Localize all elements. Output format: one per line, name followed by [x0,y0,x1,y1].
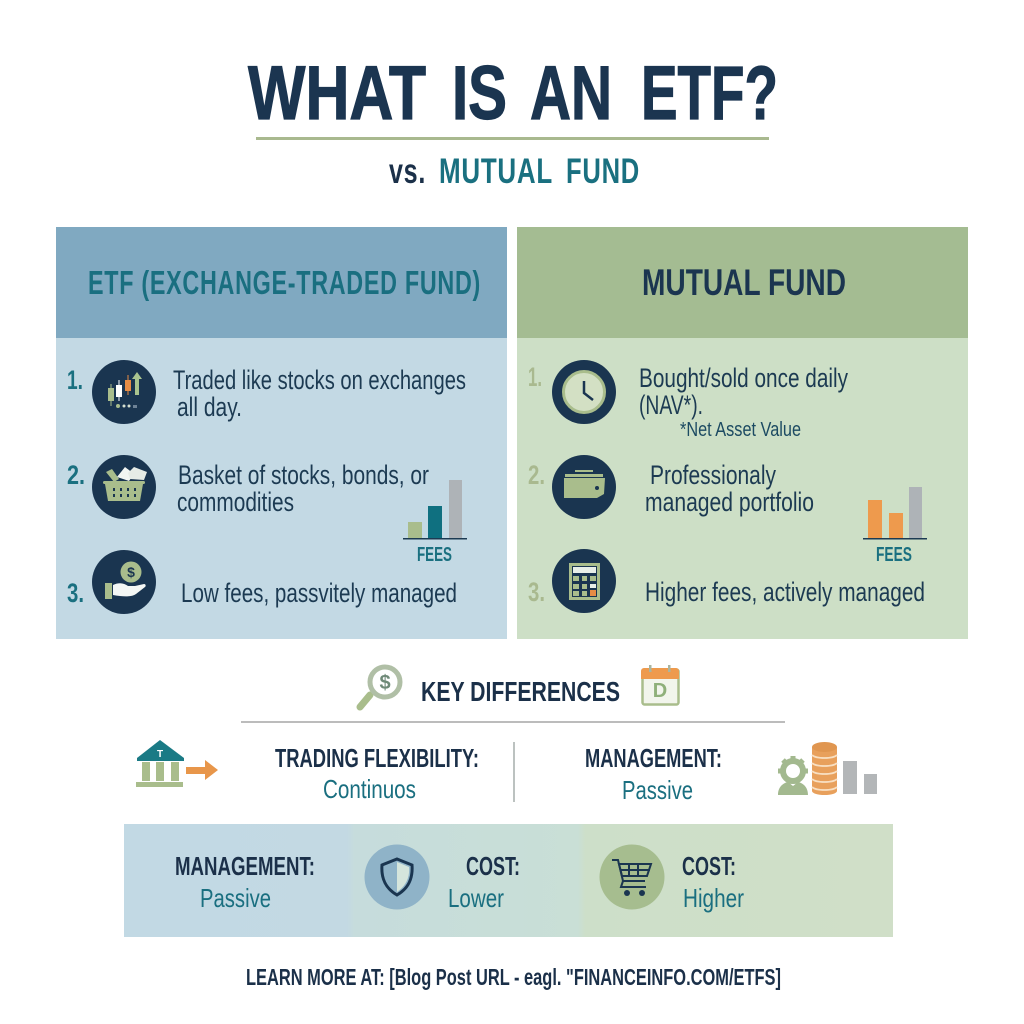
strip: management [175,851,315,913]
difference: trading flexibility [275,743,479,804]
ETF item 3: $ [127,564,135,580]
icon: magnifier with dollar [360,667,400,707]
ETF item 3: 3. [67,578,84,608]
icon: bank with arrow: T [157,749,163,760]
icon: gear, coins and bars [778,742,877,795]
subtitle: FUND [566,152,640,191]
ETF item 3: Low fees, passvitely managed [181,578,457,608]
Mutual Fund item 2: Professionaly [650,460,776,490]
ETF item 2 [67,455,429,519]
title: ETF? [641,51,778,136]
Mutual Fund header band [517,227,968,338]
Mutual Fund item 3: 3. [528,577,545,607]
icon: magnifier with dollar: $ [379,672,391,694]
ETF item 1: Traded like stocks on exchanges [173,365,466,395]
difference: management [585,743,722,805]
footer link: LEARN MORE AT: [Blog Post URL - eagl. "FINANCEINFO.COM/ETFS] [246,964,781,990]
title: WHAT [248,51,426,136]
ETF item 1: all day. [177,392,242,422]
panel: ETF [56,227,507,639]
strip: ETF cost: Lower [448,883,504,913]
ETF item 2: 2. [67,460,85,490]
ETF item 1: 1. [67,365,83,395]
strip: mutual fund cost: COST: [682,851,736,881]
Mutual Fund header band: MUTUAL FUND [642,262,846,303]
Mutual Fund item 1 [528,360,848,441]
Mutual Fund fees chart: FEES [876,544,912,566]
subtitle [389,152,640,191]
Mutual Fund item 1: (NAV*). [639,390,703,420]
ETF fees chart [403,480,467,566]
Mutual Fund item 2 [528,455,814,519]
strip: mutual fund cost: Higher [683,883,744,913]
difference: trading flexibility: Continuos [323,774,416,804]
icon: calendar: D [653,680,667,702]
icon: shield [364,844,430,910]
Mutual Fund fees chart [863,487,927,566]
ETF header band [56,227,507,338]
icon: calendar [641,665,679,704]
ETF item 2: Basket of stocks, bonds, or [178,460,429,490]
ETF item 3 [67,550,457,614]
Mutual Fund item 2: 2. [528,460,545,490]
Mutual Fund item 1: 1. [528,362,542,392]
ETF header band: ETF (EXCHANGE-TRADED FUND) [88,264,481,301]
title: AN [530,51,612,136]
Mutual Fund item 2: managed portfolio [645,487,814,517]
Mutual Fund item 3: Higher fees, actively managed [645,577,925,607]
strip: mutual fund cost [682,851,744,913]
panel: comparison strip [124,824,893,937]
Mutual Fund item 3 [528,549,925,613]
icon: shopping cart [600,844,664,910]
subtitle: MUTUAL [439,152,553,191]
ETF fees chart: FEES [417,544,452,566]
heading: key differences: KEY DIFFERENCES [421,676,620,707]
Mutual Fund item 1: Bought/sold once daily [639,363,848,393]
strip: ETF cost: COST: [466,851,520,881]
difference: management: Passive [622,775,693,805]
title [248,51,778,136]
ETF item 1 [67,360,466,424]
icon: bank with arrow [136,740,218,787]
strip: ETF cost [448,851,520,913]
strip: management: MANAGEMENT: [175,851,315,881]
strip: management: Passive [200,883,271,913]
ETF item 2: commodities [177,487,294,517]
difference: trading flexibility: TRADING FLEXIBILITY: [275,743,479,773]
panel: Mutual Fund [517,227,968,639]
title: IS [452,51,507,136]
difference: management: MANAGEMENT: [585,743,722,773]
subtitle: vs. [389,152,426,191]
Mutual Fund item 1: *Net Asset Value [680,419,801,441]
